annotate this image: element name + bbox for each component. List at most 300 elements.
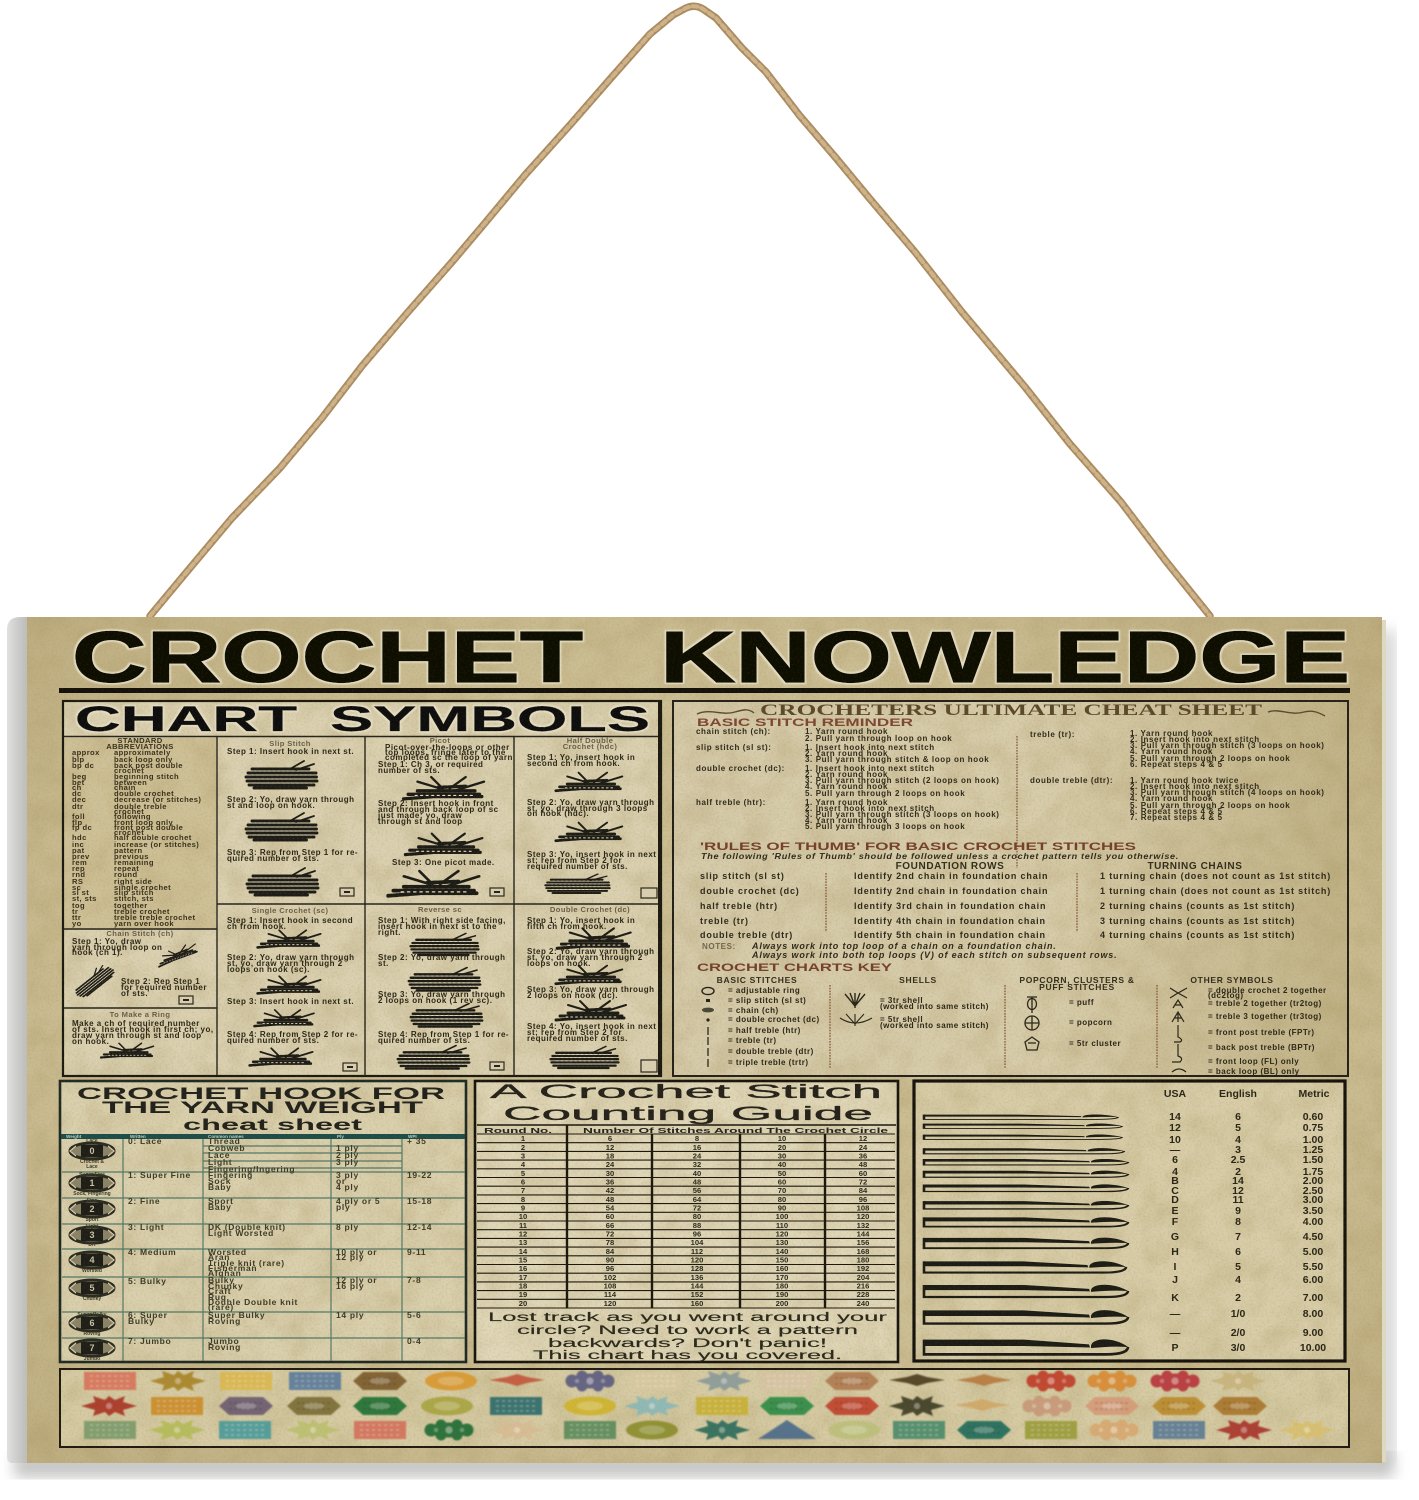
yarn table text: Light Worsted — [208, 1228, 274, 1238]
counting table values: 48 — [606, 1195, 614, 1204]
yarn weight icons: 1 — [89, 1178, 95, 1188]
yarn table text: 12-14 — [407, 1222, 432, 1232]
counting guide title — [490, 1082, 882, 1125]
reverse single crochet block: Step 1: With right side facing, — [378, 916, 506, 925]
standard abbreviations list: foll — [72, 812, 85, 821]
standard abbreviations list: yo — [72, 919, 82, 928]
standard abbreviations list: hdc — [72, 833, 87, 842]
yarn table text: or — [336, 1176, 346, 1186]
main title — [72, 618, 1350, 698]
yarn table text: Fingering — [208, 1170, 253, 1180]
counting table values: 120 — [857, 1212, 869, 1221]
counting table values: 72 — [859, 1178, 867, 1186]
standard abbreviations list: together — [114, 901, 148, 910]
hook size table: 4 — [1235, 1274, 1241, 1286]
counting table values: 70 — [778, 1186, 786, 1195]
counting table values: 36 — [859, 1152, 867, 1160]
picot block — [377, 736, 513, 896]
yarn table text: Double Double knit — [208, 1297, 298, 1307]
double crochet block: Step 1: Yo, insert hook in — [527, 916, 635, 925]
rules of thumb table: 3 turning chains (counts as 1st stitch) — [1100, 916, 1295, 926]
basic stitch reminder heading: BASIC STITCH REMINDER — [697, 717, 913, 729]
shells key: = 3tr shell — [880, 996, 923, 1005]
rules of thumb table: Always work into both top loops (V) of each stitch on subsequent rows. — [751, 950, 1118, 960]
standard abbreviations list: repeat — [114, 864, 139, 873]
double crochet block: fifth ch from hook. — [527, 922, 607, 931]
hook size table — [1164, 1088, 1330, 1354]
standard abbreviations list: dec — [72, 795, 86, 804]
yarn weight icons: Lace — [86, 1164, 98, 1170]
rules of thumb table: Identify 4th chain in foundation chain — [854, 916, 1046, 926]
counting table values: 24 — [606, 1160, 615, 1169]
basic stitches key: = double crochet (dc) — [728, 1015, 820, 1024]
hook size table: K — [1171, 1292, 1179, 1304]
hook size table: 12 — [1169, 1122, 1181, 1134]
counting table values: 84 — [606, 1247, 615, 1256]
yarn table text: 2: Fine — [128, 1196, 160, 1206]
hook size table: 5 — [1235, 1261, 1241, 1273]
counting guide caption — [488, 1312, 887, 1362]
other symbols key: = front post treble (FPTr) — [1208, 1028, 1315, 1037]
to make a ring block: on hook. — [72, 1037, 109, 1046]
standard abbreviations list: ch — [72, 783, 82, 792]
cheat sheet heading: CROCHETERS ULTIMATE CHEAT SHEET — [760, 702, 1263, 719]
picot block: Step 2: Insert hook in front — [378, 799, 494, 808]
chain stitch block: of sts. — [121, 989, 148, 998]
rules of thumb table: 2 turning chains (counts as 1st stitch) — [1100, 901, 1295, 911]
half double crochet block: Step 3: Yo, insert hook in next — [527, 850, 656, 859]
double crochet block: Step 2: Yo, draw yarn through — [527, 947, 655, 956]
counting table values: 170 — [776, 1273, 788, 1282]
basic stitch reminder list: 1. Yarn round hook — [1130, 729, 1213, 738]
chain stitch block: hook (ch 1). — [72, 948, 123, 957]
yarn table text: 7-8 — [407, 1275, 421, 1285]
hook size table: 4 — [1172, 1166, 1178, 1178]
other symbols key: = front loop (FL) only — [1208, 1057, 1299, 1066]
basic stitch reminder list: slip stitch (sl st): — [696, 743, 772, 752]
single crochet block: ch from hook. — [227, 922, 286, 931]
yarn table grid — [62, 1139, 465, 1361]
yarn table text: 0: Lace — [128, 1136, 162, 1146]
teal table header bar: Ply — [337, 1134, 344, 1139]
counting table values: 66 — [606, 1221, 614, 1230]
hook size table: 3.50 — [1303, 1205, 1323, 1217]
title rule — [59, 688, 1350, 693]
rules of thumb table: 1 turning chain (does not count as 1st stitch) — [1100, 871, 1331, 881]
counting table values: 2 — [521, 1143, 525, 1152]
picot block: Picot-over-the-loops or other — [385, 743, 510, 752]
standard abbreviations list: crochet — [114, 807, 144, 816]
counting table values: 30 — [778, 1152, 786, 1160]
hook size table: 7 — [1235, 1231, 1241, 1243]
standard abbreviations list: rnd — [72, 870, 85, 879]
standard abbreviations list: fp dc — [72, 823, 92, 832]
yarn table text: 3 ply — [336, 1170, 359, 1180]
slip stitch block: Step 2: Yo, draw yarn through — [227, 795, 355, 804]
standard abbreviations list: following — [114, 812, 151, 821]
yarn table text: Bulky — [128, 1316, 155, 1326]
yarn table text: Light — [208, 1157, 232, 1167]
hook size table: 6 — [1235, 1111, 1241, 1123]
basic stitch reminder list: 2. Yarn round hook — [805, 749, 888, 758]
rules of thumb table: Identify 2nd chain in foundation chain — [854, 886, 1048, 896]
counting table values: 15 — [519, 1256, 528, 1264]
basic stitches key: = half treble (htr) — [728, 1026, 801, 1035]
basic stitch reminder list: 5. Pull yarn through 3 loops on hook — [805, 822, 965, 831]
counting table values: 240 — [857, 1299, 869, 1308]
standard abbreviations list: pattern — [114, 846, 143, 855]
standard abbreviations list: ABBREVIATIONS — [106, 742, 174, 751]
yarn table text: 3: Light — [128, 1222, 164, 1232]
to make a ring block: Make a ch of required number — [72, 1019, 200, 1028]
yarn table text: 10 ply or — [336, 1247, 377, 1257]
hook size table: C — [1171, 1185, 1179, 1197]
basic stitch reminder list: 3. Pull yarn through stitch (2 loops on hook) — [805, 776, 1000, 785]
hook size table: E — [1171, 1205, 1179, 1217]
counting table values: 216 — [857, 1282, 869, 1290]
counting table values: 144 — [857, 1230, 870, 1238]
counting table values: 200 — [776, 1299, 788, 1308]
counting table values: 96 — [693, 1230, 701, 1238]
yarn table text: 5: Bulky — [128, 1276, 167, 1286]
hook size table: 2/0 — [1231, 1327, 1245, 1339]
half double crochet block: Step 2: Yo, draw yarn through — [527, 798, 655, 807]
counting table values: 128 — [691, 1264, 703, 1273]
panel: chart symbols — [63, 700, 662, 1076]
parchment board — [27, 617, 1386, 1463]
yarn weight title: THE YARN WEIGHT — [102, 1098, 424, 1117]
main title: CROCHET — [72, 618, 583, 698]
half double crochet block: Crochet (hdc) — [563, 742, 617, 751]
yarn weight title: CROCHET HOOK FOR — [77, 1084, 445, 1103]
rules of thumb table: 4 turning chains (counts as 1st stitch) — [1100, 930, 1295, 940]
other symbols key: = double crochet 2 together — [1208, 986, 1327, 995]
standard abbreviations list: between — [114, 778, 147, 787]
counting table values: 60 — [778, 1178, 786, 1186]
yarn table text: 19-22 — [407, 1170, 432, 1180]
counting table values: 108 — [604, 1282, 616, 1290]
counting table values: 19 — [519, 1290, 527, 1299]
yarn table text: 12 ply or — [336, 1275, 377, 1285]
yarn weight icons: Chunky — [83, 1296, 101, 1302]
yarn weight icons: Worsted — [82, 1268, 102, 1274]
hook size table: 6.00 — [1303, 1274, 1323, 1286]
popcorn clusters and puff stitches key — [1019, 975, 1135, 1050]
yarn weight title: cheat sheet — [183, 1117, 362, 1134]
other symbols key: = treble 2 together (tr2tog) — [1208, 999, 1322, 1008]
yarn table text: Jumbo — [208, 1336, 239, 1346]
hook size table: 9.00 — [1303, 1327, 1323, 1339]
yarn table text: DK (Double knit) — [208, 1222, 286, 1232]
single crochet block: Step 2: Yo, draw yarn through — [227, 953, 355, 962]
chain stitch block: Step 2: Rep Step 1 — [121, 977, 200, 986]
yarn weight icons: 5 — [89, 1283, 95, 1293]
standard abbreviations list: prev — [72, 852, 90, 861]
slip stitch block: st and loop on hook. — [227, 801, 315, 810]
yarn table text: Thread — [208, 1136, 241, 1146]
counting table values: 96 — [606, 1264, 614, 1273]
rules of thumb table: Identify 5th chain in foundation chain — [854, 930, 1046, 940]
double crochet block: Double Crochet (dc) — [550, 905, 630, 914]
popcorn clusters and puff stitches key: = popcorn — [1069, 1018, 1112, 1027]
standard abbreviations list: crochet — [114, 766, 144, 775]
rules of thumb table: half treble (htr) — [700, 901, 778, 911]
half double crochet block: st; rep from Step 2 for — [527, 856, 622, 865]
counting table values: 5 — [521, 1169, 526, 1178]
counting table values: 180 — [857, 1256, 869, 1264]
yarn table text: ply — [336, 1202, 350, 1212]
counting table values: 56 — [693, 1186, 701, 1195]
half double crochet block: Step 1: Yo, insert hook in — [527, 753, 635, 762]
counting table values: 1 — [521, 1134, 526, 1143]
basic stitch reminder list: 5. Pull yarn through 2 loops on hook — [805, 789, 965, 798]
counting table values: 12 — [519, 1230, 527, 1238]
half double crochet block — [527, 736, 657, 898]
yarn weight icons: Roving — [84, 1331, 100, 1337]
standard abbreviations list: front post double — [114, 823, 183, 832]
rules of thumb table: TURNING CHAINS — [1147, 861, 1243, 872]
yarn table text: 4 ply or 5 — [336, 1196, 380, 1206]
basic stitch reminder list: half treble (htr): — [696, 798, 766, 807]
heading: chart symbols: CHART — [75, 700, 297, 739]
counting table values: 102 — [604, 1273, 616, 1282]
yarn table text: Sock — [208, 1176, 231, 1186]
counting table values: 10 — [519, 1212, 527, 1221]
standard abbreviations list: tr — [72, 907, 78, 916]
rules of thumb table: treble (tr) — [700, 916, 749, 926]
basic stitch reminder list: 2. Pull yarn through loop on hook — [805, 734, 952, 743]
yarn weight icons: Fine — [87, 1198, 97, 1204]
basic stitch reminder list: 3. Pull yarn through stitch (3 loops on hook) — [1130, 741, 1325, 750]
single crochet block: st, yo, draw yarn through 2 — [227, 959, 343, 968]
counting table values: 152 — [691, 1290, 703, 1299]
hook size table: Metric — [1299, 1088, 1330, 1100]
counting guide caption: Lost track as you went around your — [488, 1312, 887, 1324]
yarn table text: 14 ply — [336, 1310, 364, 1320]
counting guide title: A Crochet Stitch — [490, 1082, 882, 1103]
basic stitches key: = triple treble (trtr) — [728, 1058, 809, 1067]
basic stitch reminder list: 5. Pull yarn through 2 loops on hook — [1130, 801, 1290, 810]
yarn weight icons: Lace — [86, 1138, 98, 1144]
counting table values: 40 — [778, 1160, 786, 1169]
standard abbreviations list: bp dc — [72, 761, 94, 770]
shells key: (worked into same stitch) — [880, 1021, 989, 1030]
other symbols key: = back loop (BL) only — [1208, 1067, 1300, 1076]
hook size table: 8.00 — [1303, 1308, 1323, 1320]
basic stitches key: = adjustable ring — [728, 986, 800, 995]
basic stitch reminder list: 2. Insert hook into next stitch — [1130, 735, 1260, 744]
popcorn clusters and puff stitches key: = puff — [1069, 998, 1094, 1007]
counting table values: 144 — [691, 1282, 704, 1290]
paper texture — [27, 617, 1382, 1463]
counting table values: 204 — [857, 1273, 870, 1282]
standard abbreviations list: previous — [114, 852, 149, 861]
hook size table: 4.00 — [1303, 1216, 1323, 1228]
counting table values: 16 — [519, 1264, 527, 1273]
light paper panels backing — [61, 702, 1349, 1446]
basic stitch reminder list: 1. Insert hook into next stitch — [805, 743, 935, 752]
double crochet block: Step 3: Yo, draw yarn through — [527, 985, 655, 994]
jute hanging rope — [150, 6, 1210, 616]
hook size table: 0.60 — [1303, 1111, 1323, 1123]
standard abbreviations list: slip stitch — [114, 888, 154, 897]
board shadow — [14, 630, 1396, 1478]
hook size table: 10 — [1169, 1134, 1181, 1146]
slip stitch block: Step 3: Rep from Step 1 for re- — [227, 848, 358, 857]
basic stitch reminder list: 6. Repeat steps 4 & 5 — [1130, 760, 1223, 769]
standard abbreviations list: remaining — [114, 858, 154, 867]
hook size table: English — [1219, 1088, 1257, 1100]
rules of thumb table: The following 'Rules of Thumb' should be followed unless a crochet pattern tells you otherwise. — [701, 852, 1179, 861]
yarn table text: 0-4 — [407, 1336, 421, 1346]
counting table values: 168 — [857, 1247, 869, 1256]
yarn table text: 6: Super — [128, 1310, 168, 1320]
picot block: and through back loop of sc — [378, 805, 499, 814]
reverse single crochet block: insert hook in next st to the — [378, 922, 497, 931]
rules of thumb table — [700, 852, 1331, 960]
hook size table: I — [1174, 1261, 1177, 1273]
standard abbreviations list: st, sts — [72, 894, 97, 903]
chain stitch block: Chain Stitch (ch) — [106, 929, 174, 938]
slip stitch block: Slip Stitch — [269, 739, 311, 748]
counting table values: 190 — [776, 1290, 788, 1299]
hook size table: 8 — [1235, 1216, 1241, 1228]
single crochet block: Single Crochet (sc) — [252, 906, 328, 915]
standard abbreviations list: sl st — [72, 888, 89, 897]
counting table values: 192 — [857, 1264, 869, 1273]
basic stitch reminder list: 2. Insert hook into next stitch — [1130, 782, 1260, 791]
rules of thumb table: NOTES: — [702, 942, 736, 951]
standard abbreviations list: half double crochet — [114, 833, 192, 842]
hook size table: USA — [1164, 1088, 1187, 1100]
counting table values: 12 — [859, 1134, 867, 1143]
picot block: top loops, fringe later to the — [385, 748, 506, 757]
yarn table text: Worsted — [208, 1247, 247, 1257]
standard abbreviations list: dtr — [72, 802, 83, 811]
counting table values: 90 — [606, 1256, 614, 1264]
shells key: SHELLS — [899, 975, 937, 985]
counting table values: 12 — [606, 1143, 614, 1152]
single crochet block: Step 3: Insert hook in next st. — [227, 997, 354, 1006]
standard abbreviations list: flp — [72, 818, 82, 827]
yarn weight icons: 6 — [89, 1318, 95, 1328]
yarn weight icons: 0 — [89, 1146, 95, 1156]
counting table values: 10 — [778, 1134, 786, 1143]
counting table values: 60 — [606, 1212, 614, 1221]
teal table header bar: Weight — [66, 1134, 82, 1139]
counting table values: 42 — [606, 1186, 614, 1195]
counting table grid — [477, 1125, 896, 1308]
yarn table text: Rug — [208, 1292, 227, 1302]
basic stitch reminder list: 4. Yarn round hook — [1130, 794, 1213, 803]
yarn table text: Super Bulky — [208, 1310, 265, 1320]
hook size table: 5.00 — [1303, 1246, 1323, 1258]
basic stitch reminder list: 1. Yarn round hook — [805, 727, 888, 736]
counting table values: 228 — [857, 1290, 869, 1299]
to make a ring block: draw yarn through st and loop — [72, 1031, 202, 1040]
counting table values: 20 — [519, 1299, 527, 1308]
standard abbreviations list: RS — [72, 877, 83, 886]
yarn table text: Aran — [208, 1252, 230, 1262]
heading: chart symbols: SYMBOLS — [330, 700, 650, 739]
hook size table: 7.00 — [1303, 1292, 1323, 1304]
basic stitch reminder list: 1. Yarn round hook — [805, 798, 888, 807]
double crochet block: st, yo, draw yarn through 2 — [527, 953, 643, 962]
hook size table: 14 — [1232, 1175, 1244, 1187]
double crochet block: st; rep from Step 2 for — [527, 1028, 622, 1037]
double crochet block: Step 4: Yo, insert hook in next — [527, 1022, 656, 1031]
heading flourishes — [697, 710, 1325, 716]
yarn table text: 15-18 — [407, 1196, 432, 1206]
yarn weight icons: Sport — [85, 1217, 99, 1223]
counting table values: 132 — [857, 1221, 869, 1230]
standard abbreviations list: right side — [114, 877, 152, 886]
hook size table: 3/0 — [1231, 1342, 1245, 1354]
motif row 1 — [84, 1370, 1266, 1392]
hook size table: 3.00 — [1303, 1194, 1323, 1206]
standard abbreviations list: yarn over hook — [114, 919, 174, 928]
standard abbreviations list: approximately — [114, 748, 171, 757]
standard abbreviations list: rep — [72, 864, 85, 873]
standard abbreviations list — [72, 736, 201, 928]
yarn table text: (rare) — [208, 1302, 234, 1312]
other symbols key — [1170, 975, 1327, 1076]
counting table values: 4 — [521, 1160, 526, 1169]
standard abbreviations list: double treble — [114, 802, 167, 811]
hook size table: 2.50 — [1303, 1185, 1323, 1197]
chart symbols grid lines — [64, 736, 658, 1075]
rules of thumb table: double treble (dtr) — [700, 930, 793, 940]
hook size table: 4.50 — [1303, 1231, 1323, 1243]
counting table values: 17 — [519, 1273, 527, 1282]
hook size table: F — [1172, 1216, 1179, 1228]
yarn table text: Roving — [208, 1316, 241, 1326]
basic stitch reminder list: 2. Insert hook into next stitch — [805, 804, 935, 813]
standard abbreviations list: increase (or stitches) — [114, 840, 199, 849]
reverse single crochet block: st. — [378, 959, 389, 968]
counting table header: Number Of Stitches Around The Crochet Circle — [583, 1128, 888, 1135]
counting table values: 16 — [693, 1143, 701, 1152]
counting table values: 160 — [776, 1264, 788, 1273]
yarn weight icons: Jumbo — [84, 1356, 100, 1362]
yarn table text: Afghan — [208, 1268, 241, 1278]
reverse single crochet block: Step 2: Yo, draw yarn through — [378, 953, 506, 962]
standard abbreviations list: tog — [72, 901, 85, 910]
counting table values: 90 — [778, 1204, 786, 1212]
basic stitch reminder list: 5. Pull yarn through 2 loops on hook — [1130, 754, 1290, 763]
counting table values: 110 — [776, 1221, 788, 1230]
single crochet block: Step 4: Rep from Step 2 for re- — [227, 1030, 358, 1039]
single crochet block: loops on hook (sc). — [227, 965, 310, 974]
panel: crocheters ultimate cheat sheet — [673, 701, 1348, 1076]
counting guide caption: This chart has you covered. — [533, 1350, 842, 1362]
basic stitch reminder list: 1. Yarn round hook twice — [1130, 776, 1239, 785]
rules of thumb table: slip stitch (sl st) — [700, 871, 785, 881]
rules of thumb table: double crochet (dc) — [700, 886, 800, 896]
standard abbreviations list: stitch, sts — [114, 894, 154, 903]
hook size table: 6 — [1235, 1246, 1241, 1258]
yarn table text: 1 ply — [336, 1143, 359, 1153]
single crochet block: Step 1: Insert hook in second — [227, 916, 353, 925]
double crochet block: loops on hook. — [527, 959, 591, 968]
other symbols key: = treble 3 together (tr3tog) — [1208, 1012, 1322, 1021]
counting table values: 60 — [859, 1169, 867, 1178]
yarn table text: Lace — [208, 1150, 230, 1160]
hook size table: D — [1171, 1194, 1179, 1206]
counting table header — [484, 1128, 888, 1135]
counting table values: 156 — [857, 1238, 869, 1247]
hook size table: B — [1171, 1175, 1179, 1187]
